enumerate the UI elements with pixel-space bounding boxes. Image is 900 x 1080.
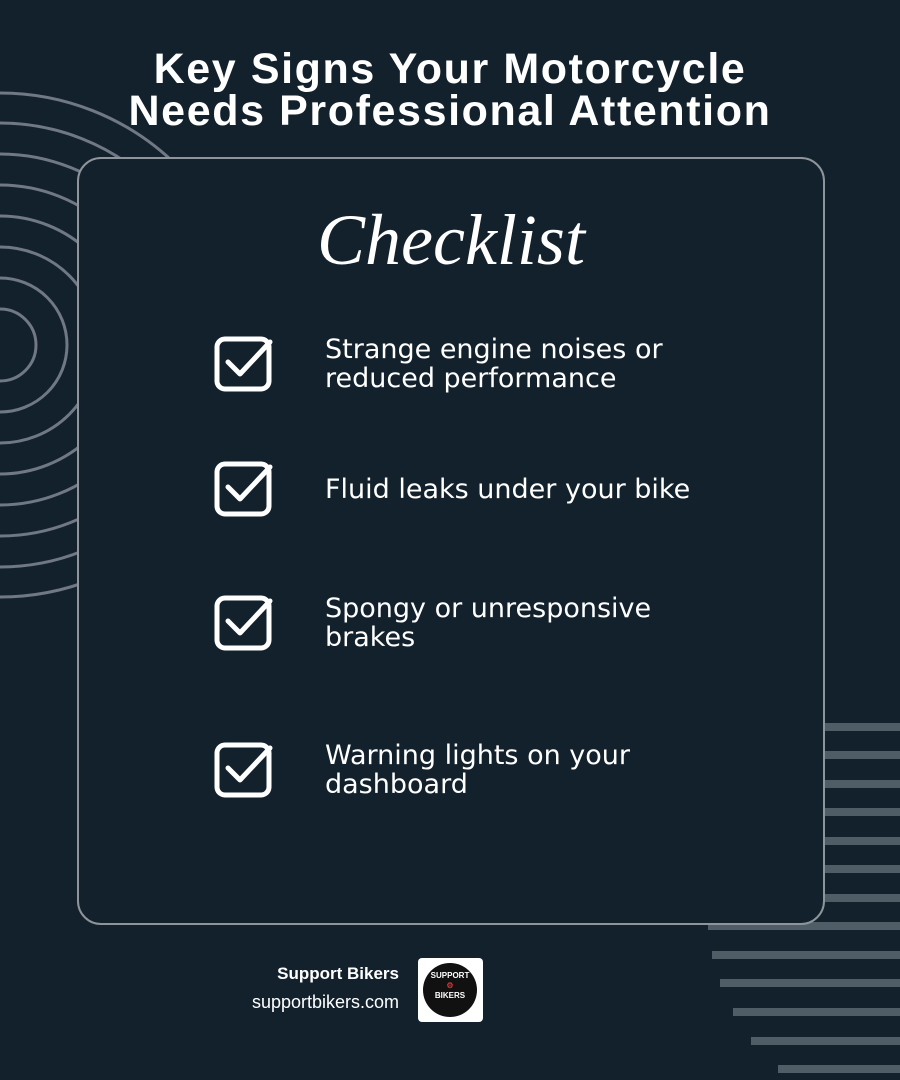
text 3 xyxy=(325,593,651,653)
icon: check box xyxy=(214,596,272,650)
icon: check box xyxy=(214,742,272,798)
footer brand: Support Bikers xyxy=(277,964,399,983)
footer brand: supportbikers.com xyxy=(252,992,399,1012)
heading: Checklist: Checklist xyxy=(317,200,585,280)
title xyxy=(129,45,771,135)
title: Needs Professional Attention xyxy=(129,87,771,135)
text 2: Fluid leaks under your bike xyxy=(325,474,690,504)
text 1: Strange engine noises or xyxy=(325,334,663,365)
item 4 xyxy=(214,740,630,800)
item 3 xyxy=(214,593,651,653)
text 3: brakes xyxy=(325,622,415,653)
item 1 xyxy=(214,334,663,394)
text 1: reduced performance xyxy=(325,363,616,394)
panel: checklist xyxy=(77,157,825,925)
logo: ⚙ xyxy=(446,981,454,990)
icon: check box xyxy=(214,336,272,392)
text 4: dashboard xyxy=(325,769,468,800)
text 4: Warning lights on your xyxy=(325,740,630,771)
logo: BIKERS xyxy=(435,991,465,1000)
icon: check box xyxy=(214,462,272,516)
title: Key Signs Your Motorcycle xyxy=(154,45,746,93)
text 3: Spongy or unresponsive xyxy=(325,593,651,624)
logo xyxy=(418,958,483,1022)
text 1 xyxy=(325,334,663,394)
logo: SUPPORT xyxy=(431,971,469,980)
footer brand xyxy=(252,964,399,1012)
text 4 xyxy=(325,740,630,800)
item 2 xyxy=(214,462,690,516)
